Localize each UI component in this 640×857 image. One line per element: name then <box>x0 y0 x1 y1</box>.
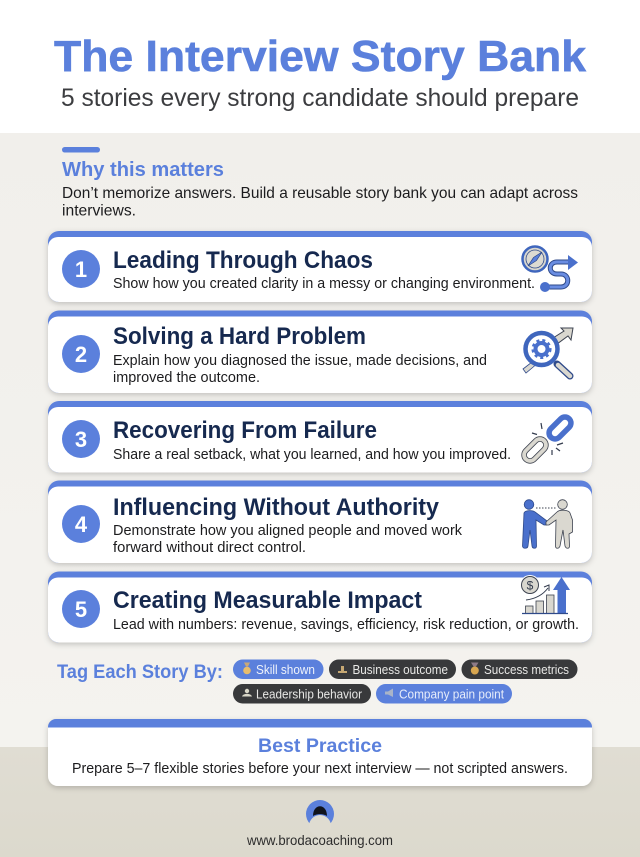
card 4: influencing without authority: Influencing Without Authority <box>113 494 440 521</box>
tag: leadership behavior: Leadership behavior <box>256 688 362 702</box>
tag: business outcome <box>329 660 456 679</box>
card 3: recovering from failure: Recovering From Failure <box>113 417 377 444</box>
card 1: leading through chaos: 1 <box>75 257 87 282</box>
tag: success metrics <box>462 660 578 679</box>
card 1: leading through chaos: Leading Through Chaos <box>113 247 373 274</box>
card 1: leading through chaos <box>48 231 592 302</box>
title: The Interview Story Bank <box>54 32 587 81</box>
card 4: influencing without authority <box>48 480 592 563</box>
icon: growth chart with dollar coin: $ <box>527 578 534 592</box>
card 5: creating measurable impact: Lead with numbers: revenue, savings, efficiency, risk reduction, or growth. <box>113 617 579 633</box>
card 2: solving a hard problem: Solving a Hard Problem <box>113 323 366 350</box>
card 4: influencing without authority: 4 <box>75 512 88 537</box>
tag: leadership behavior <box>233 684 371 704</box>
section: why this matters: Why this matters <box>62 159 224 181</box>
card 3: recovering from failure <box>48 401 592 472</box>
card 5: creating measurable impact: Creating Measurable Impact <box>113 587 422 614</box>
icon: magnifier with gear and arrow <box>523 328 573 376</box>
section: why this matters: Don’t memorize answers. Build a reusable story bank you can adapt across <box>62 185 578 202</box>
logo <box>306 800 334 837</box>
card 2: solving a hard problem: Explain how you diagnosed the issue, made decisions, and <box>113 353 487 369</box>
tag: company pain point: Company pain point <box>399 688 504 702</box>
icon: broken chain link <box>522 415 573 463</box>
icon: growth chart with dollar coin <box>520 575 570 614</box>
icon: handshake <box>522 500 572 548</box>
card 1: leading through chaos: Show how you created clarity in a messy or changing environment. <box>113 276 535 292</box>
tag: skill shown: Skill shown <box>256 663 315 677</box>
card 4: influencing without authority: Demonstrate how you aligned people and moved work <box>113 523 463 539</box>
card 3: recovering from failure: 3 <box>75 427 87 452</box>
tag: company pain point <box>376 684 512 704</box>
panel: best practice <box>48 719 592 786</box>
tag: business outcome: Business outcome <box>352 663 448 677</box>
card 2: solving a hard problem: improved the outcome. <box>113 370 260 386</box>
icon: compass and route <box>522 246 578 292</box>
tag: skill shown <box>233 660 324 679</box>
card 2: solving a hard problem: 2 <box>75 342 87 367</box>
card 4: influencing without authority: forward without direct control. <box>113 540 306 556</box>
card 2: solving a hard problem <box>48 310 592 393</box>
card 3: recovering from failure: Share a real setback, what you learned, and how you improved. <box>113 447 511 463</box>
section: why this matters <box>62 147 578 220</box>
subtitle: 5 stories every strong candidate should prepare <box>61 84 579 112</box>
card 5: creating measurable impact <box>48 572 592 642</box>
website url: www.brodacoaching.com <box>246 833 393 848</box>
panel: best practice: Best Practice <box>258 735 382 757</box>
tags heading: Tag Each Story By: <box>57 661 223 683</box>
panel: best practice: Prepare 5–7 flexible stories before your next interview — not scripted answers. <box>72 760 568 777</box>
card 5: creating measurable impact: 5 <box>75 597 87 622</box>
section: why this matters: interviews. <box>62 202 136 220</box>
tag: success metrics: Success metrics <box>484 663 569 677</box>
